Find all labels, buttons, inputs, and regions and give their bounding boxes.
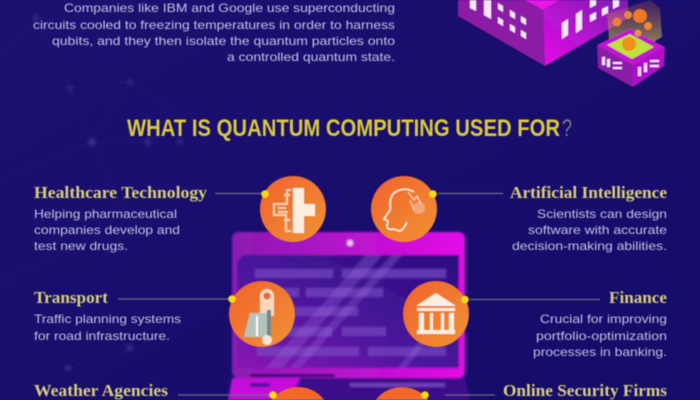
item: Online Security Firms: [376, 381, 667, 400]
screen glare stripes: [266, 255, 428, 368]
icon: small hologram box: [597, 0, 665, 87]
item: Healthcare Technology: Healthcare Technology: [34, 183, 208, 202]
item: Healthcare Technology: test new drugs.: [34, 239, 128, 253]
icon: medical cross: [260, 176, 326, 242]
item: Healthcare Technology: [34, 176, 326, 253]
icon: AI head: [371, 176, 437, 242]
item: Transport: [34, 281, 295, 347]
item: Healthcare Technology: companies develop and: [34, 223, 180, 237]
intro paragraph: [33, 1, 395, 64]
item: Weather Agencies: [34, 381, 324, 400]
intro paragraph: Companies like IBM and Google use superconducting: [64, 1, 395, 15]
item: Artificial Intelligence: [371, 176, 667, 253]
icon: bank: [403, 281, 469, 347]
intro paragraph: qubits, and they then isolate the quantum particles onto: [52, 34, 395, 48]
item: Transport: for road infrastructure.: [34, 329, 170, 343]
icon: traffic light and road: [229, 281, 295, 347]
laptop keyboard base: [228, 378, 470, 400]
item: Finance: [403, 281, 667, 359]
item: Transport: Transport: [34, 288, 108, 307]
item: Finance: Crucial for improving: [540, 312, 667, 326]
item: Finance: Finance: [609, 288, 667, 307]
item: Artificial Intelligence: Artificial Intelligence: [510, 183, 667, 202]
item: Transport: Traffic planning systems: [34, 312, 181, 326]
laptop screen lid: [232, 232, 465, 378]
icon: quantum building illustration: [458, 0, 628, 66]
item: Finance: portfolio-optimization: [536, 329, 667, 343]
item: Weather Agencies: Weather Agencies: [34, 381, 168, 400]
item: Artificial Intelligence: decision-making abilities.: [512, 239, 667, 253]
item: Artificial Intelligence: Scientists can design: [537, 207, 667, 221]
intro paragraph: circuits cooled to freezing temperatures in order to harness: [33, 18, 395, 32]
title: WHAT IS QUANTUM COMPUTING USED FOR: [127, 115, 560, 142]
icon: security circle: [376, 387, 428, 400]
item: Online Security Firms: Online Security Firms: [503, 381, 667, 400]
item: Finance: processes in banking.: [533, 345, 667, 359]
camera dot: [347, 240, 353, 246]
item: Healthcare Technology: Helping pharmaceutical: [34, 207, 177, 221]
item: Artificial Intelligence: software with accurate: [528, 223, 667, 237]
code bars: [250, 269, 446, 356]
title: ?: [562, 115, 572, 142]
intro paragraph: a controlled quantum state.: [227, 50, 395, 64]
icon: weather circle: [272, 387, 324, 400]
laptop display: [237, 255, 459, 368]
laptop illustration: [228, 232, 470, 400]
